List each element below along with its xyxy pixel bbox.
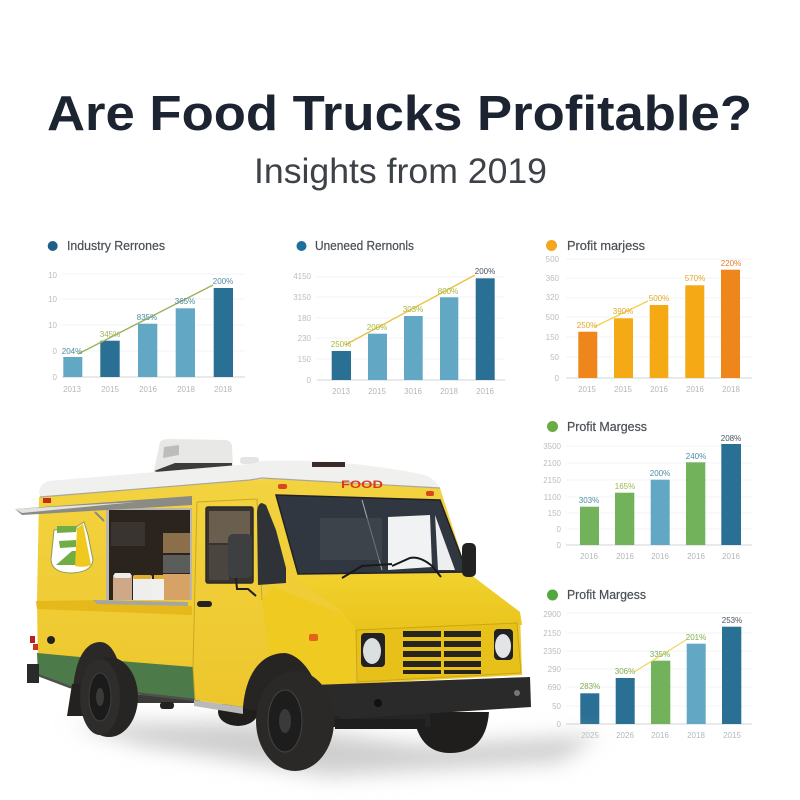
- chart 1 y axis labels: 0: [53, 373, 58, 382]
- chart 4 y axis labels: 2100: [543, 459, 562, 468]
- chart 2 value labels: 200%: [367, 323, 387, 332]
- chart 3 value labels: 500%: [649, 294, 669, 303]
- chart 1 value labels: 345%: [100, 330, 120, 339]
- cab side shading: [262, 587, 357, 688]
- coffee cups: [113, 573, 164, 600]
- chart 1 value labels: [62, 277, 233, 356]
- chart 5 y axis labels: [543, 610, 562, 729]
- chart 5 icon: [547, 590, 558, 600]
- white roof: [39, 461, 440, 497]
- chart 3 y axis labels: 500: [546, 255, 560, 264]
- chart 2 trend line: [345, 275, 475, 345]
- chrome step: [194, 700, 243, 714]
- chart 2 value labels: 800%: [438, 287, 458, 296]
- chart 4 y axis labels: [543, 442, 562, 550]
- chart 4 value labels: 240%: [686, 452, 706, 461]
- chart 5 y axis labels: 690: [548, 683, 562, 692]
- chart 2 x axis labels: 2016: [476, 387, 494, 396]
- chart 2 value labels: 250%: [331, 340, 351, 349]
- serving window: [106, 508, 192, 600]
- chart 2 y axis labels: 150: [298, 355, 312, 364]
- chart 2 x axis labels: 2013: [332, 387, 350, 396]
- chart 2 value labels: [331, 267, 495, 349]
- chart 4 x axis labels: 2016: [616, 552, 634, 561]
- chart 3 x axis labels: 2018: [722, 385, 740, 394]
- far side wheels: [130, 695, 489, 753]
- chart 3 y axis labels: 360: [546, 274, 560, 283]
- chart 4 y axis labels: 3500: [543, 442, 562, 451]
- chart 2 icon: [296, 241, 306, 251]
- chart 3 trend line: [594, 301, 648, 327]
- front bumper: [313, 677, 531, 729]
- chart 1 x axis labels: 2018: [177, 385, 195, 394]
- chart 2 y axis labels: 180: [298, 314, 312, 323]
- rear wheel: [80, 657, 138, 737]
- chart 1 value labels: 835%: [137, 313, 157, 322]
- chart 4 icon: [547, 421, 558, 432]
- right headlight: [494, 629, 513, 660]
- chart 2 y axis labels: 3150: [293, 293, 312, 302]
- windshield: [276, 495, 467, 574]
- chart 5 x axis labels: 2018: [687, 731, 705, 740]
- cab marker lights: [278, 484, 434, 496]
- chart 2 x axis labels: [332, 387, 494, 396]
- chart: profit margins blue: [543, 588, 752, 740]
- chart 3 icon: [546, 240, 557, 251]
- chart 2 value labels: 303%: [403, 305, 423, 314]
- chart 3 value labels: 390%: [613, 307, 633, 316]
- chart 4 value labels: 208%: [721, 434, 741, 443]
- chart 1 y axis labels: 10: [48, 271, 58, 280]
- truck body: [37, 478, 522, 707]
- radiator grille: [403, 629, 481, 675]
- chart 5 y axis labels: 2150: [543, 629, 562, 638]
- service shelf: [93, 600, 188, 606]
- right mirror: [462, 543, 476, 577]
- chart 4 x axis labels: [580, 552, 740, 561]
- chart 5 heading: Profit Margess: [567, 588, 646, 602]
- chart 2 y axis labels: 0: [307, 376, 312, 385]
- roof air conditioner: [154, 439, 259, 473]
- chart 5 trend line: [634, 640, 686, 672]
- chart 1 x axis labels: 2013: [63, 385, 81, 394]
- awning: [15, 496, 192, 521]
- chart 3 bars: [578, 270, 740, 378]
- chart 4 y axis labels: 1100: [544, 493, 562, 502]
- chart 4 value labels: [579, 434, 741, 505]
- chart 5 value labels: 253%: [722, 616, 742, 625]
- chart 5 value labels: [580, 616, 742, 691]
- chart 4 x axis labels: 2016: [687, 552, 705, 561]
- chart 1 bars: [63, 288, 233, 377]
- chart 3 heading: Profit marjess: [567, 239, 645, 253]
- chart 1 x axis labels: [63, 385, 232, 394]
- chart 5 value labels: 201%: [686, 633, 706, 642]
- front wheel arch: [243, 653, 318, 710]
- side door window: [206, 507, 253, 583]
- chart 5 x axis labels: [581, 731, 741, 740]
- chart 1 value labels: 365%: [175, 297, 195, 306]
- chart 4 value labels: 200%: [650, 469, 670, 478]
- windshield wipers: [342, 558, 441, 578]
- serving ledge: [36, 600, 192, 615]
- rear wheel arch: [73, 642, 125, 697]
- food truck illustration: [15, 439, 600, 776]
- chart 2 y axis labels: 230: [298, 334, 312, 343]
- chart 3 x axis labels: 2016: [650, 385, 668, 394]
- chart 5 value labels: 335%: [650, 650, 670, 659]
- chart 2 x axis labels: 2018: [440, 387, 458, 396]
- title: Are Food Trucks Profitable?: [47, 87, 752, 141]
- wooden crates: [163, 533, 190, 600]
- chart 3 y axis labels: 320: [546, 293, 560, 302]
- chart 3 x axis labels: [578, 385, 740, 394]
- chart 3 x axis labels: 2015: [614, 385, 632, 394]
- chart 5 x axis labels: 2025: [581, 731, 599, 740]
- chart 3 value labels: [577, 259, 741, 330]
- chart 2 x axis labels: 2015: [368, 387, 386, 396]
- subtitle: Insights from 2019: [254, 152, 547, 191]
- chart 3 x axis labels: 2015: [578, 385, 596, 394]
- chart 1 x axis labels: 2018: [214, 385, 232, 394]
- chart 5 bars: [580, 627, 741, 724]
- chart 3 value labels: 220%: [721, 259, 741, 268]
- chart 4 x axis labels: 2016: [580, 552, 598, 561]
- chart 1 icon: [48, 241, 58, 251]
- chart 2 bars: [332, 278, 495, 380]
- chart 2 y axis labels: 4150: [293, 272, 312, 281]
- chart: industry revenues: [48, 239, 245, 394]
- door lines: [193, 499, 262, 700]
- chart 5 value labels: 306%: [615, 667, 635, 676]
- chart 5 y axis labels: 2350: [543, 647, 562, 656]
- chart 2 heading: Uneneed Rernonls: [315, 239, 414, 253]
- ground shadow: [70, 722, 600, 776]
- chart 3 value labels: 250%: [577, 321, 597, 330]
- chart 4 x axis labels: 2016: [722, 552, 740, 561]
- chart 3 y axis labels: [546, 255, 560, 383]
- cab side window: [257, 503, 286, 585]
- chart 4 y axis labels: 2150: [543, 476, 562, 485]
- hood: [293, 572, 522, 630]
- chart 4 y axis labels: 150: [548, 509, 562, 518]
- side mirror: [228, 534, 256, 596]
- chart 1 y axis labels: 10: [48, 295, 58, 304]
- chart 5 y axis labels: 50: [552, 702, 562, 711]
- chart: profit margins orange: [546, 239, 752, 394]
- chart 3 y axis labels: 50: [550, 353, 560, 362]
- chart 4 value labels: 303%: [579, 496, 599, 505]
- chart 2 y axis labels: [293, 272, 312, 385]
- chart 4 y axis labels: 0: [557, 541, 562, 550]
- chart 1 value labels: 204%: [62, 347, 82, 356]
- chart 5 y axis labels: 0: [557, 720, 562, 729]
- chart 5 y axis labels: 290: [548, 665, 562, 674]
- chart 3 x axis labels: 2016: [686, 385, 704, 394]
- chart 5 x axis labels: 2016: [651, 731, 669, 740]
- chart 2 x axis labels: 3016: [404, 387, 422, 396]
- cab sign: FOOD: [341, 479, 383, 491]
- chart 2 value labels: 200%: [475, 267, 495, 276]
- chart 3 value labels: 570%: [685, 274, 705, 283]
- chart: profit margins green: [543, 420, 752, 561]
- lower green stripe: [37, 653, 195, 700]
- chart 3 y axis labels: 150: [546, 333, 560, 342]
- mud flap: [67, 684, 84, 716]
- chart 4 y axis labels: 0: [557, 525, 562, 534]
- chart 1 x axis labels: 2016: [139, 385, 157, 394]
- chart: uneed revenues: [293, 239, 505, 396]
- grille recess: [356, 623, 521, 682]
- chart 3 y axis labels: 500: [546, 313, 560, 322]
- rear lights and fuel cap: [27, 498, 55, 683]
- chart 4 heading: Profit Margess: [567, 420, 647, 434]
- chart 1 heading: Industry Rerrones: [67, 239, 165, 253]
- chart 1 value labels: 200%: [213, 277, 233, 286]
- logo badge: [51, 522, 93, 573]
- roof marker light: [312, 462, 345, 467]
- chart 5 value labels: 283%: [580, 682, 600, 691]
- chart 4 x axis labels: 2016: [651, 552, 669, 561]
- chart 1 trend line: [78, 285, 213, 354]
- chart 4 bars: [580, 444, 741, 545]
- chart 5 x axis labels: 2015: [723, 731, 741, 740]
- chart 5 x axis labels: 2026: [616, 731, 634, 740]
- chart 1 y axis labels: 0: [53, 347, 58, 356]
- front wheel: [256, 671, 334, 771]
- chart 5 y axis labels: 2900: [543, 610, 562, 619]
- chart 1 y axis labels: 10: [48, 321, 58, 330]
- chart 1 x axis labels: 2015: [101, 385, 119, 394]
- chart 3 y axis labels: 0: [555, 374, 560, 383]
- left headlight: [361, 633, 385, 667]
- door handle: [197, 601, 212, 607]
- chart 1 y axis labels: [48, 271, 58, 382]
- side amber marker: [309, 634, 318, 641]
- chart 4 value labels: 165%: [615, 482, 635, 491]
